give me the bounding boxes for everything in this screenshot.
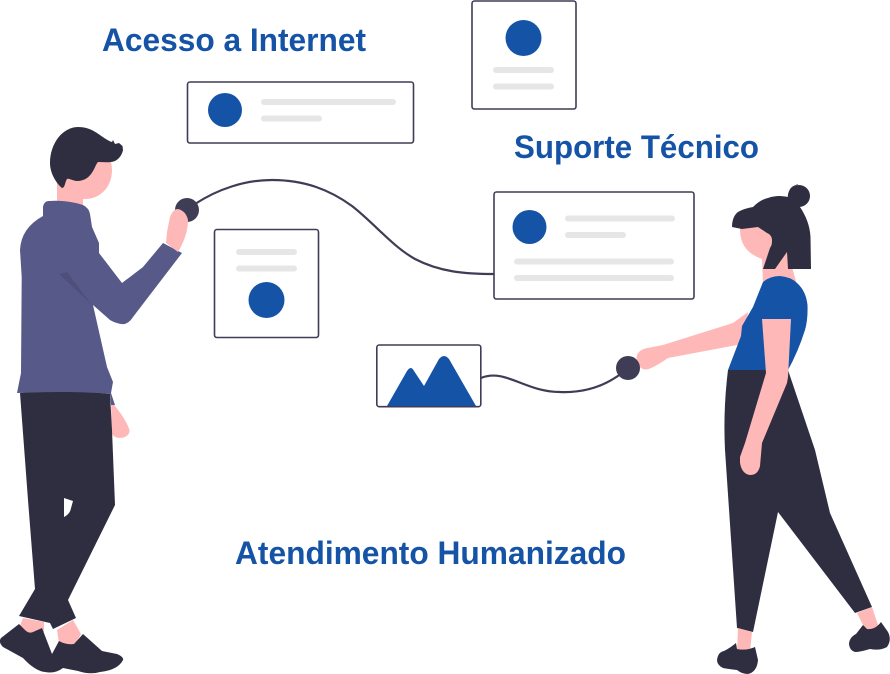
man: sweater [17,201,182,405]
woman: shirt [728,276,808,370]
woman: left arm [636,312,748,370]
woman: pants [724,370,872,632]
card: lower left [214,230,318,338]
card: image with mountains [377,345,481,407]
man: hand ball [175,198,199,222]
card: large right [494,192,694,299]
woman: hair [732,196,811,269]
man: raised hand [166,209,188,252]
man: hair [50,127,123,188]
card: top tall [472,1,576,109]
heading: Suporte Técnico: Suporte Técnico [514,129,759,165]
man: lower hand [111,403,130,438]
woman: right arm [740,319,791,475]
woman: ear [762,232,771,248]
woman: back shoe [849,622,890,652]
connector: image card to woman [481,373,622,392]
figure: man [0,127,199,673]
man: pants [19,391,115,629]
man: shoes [0,624,123,673]
figure: woman [616,184,890,674]
woman: ankles [737,607,879,652]
card: top wide [188,82,414,143]
woman: hair bun [788,185,810,207]
connector: man to large card [195,180,494,274]
man: neck and face [57,140,112,206]
woman: hand ball [616,356,640,380]
woman: bun outline [788,184,798,197]
man: sweater fold [59,272,92,305]
woman: neck and face [740,200,797,285]
man: ankles [19,618,81,646]
heading: Atendimento Humanizado: Atendimento Humanizado [235,535,626,571]
woman: front shoe [717,643,758,674]
heading: Acesso a Internet: Acesso a Internet [102,22,366,58]
